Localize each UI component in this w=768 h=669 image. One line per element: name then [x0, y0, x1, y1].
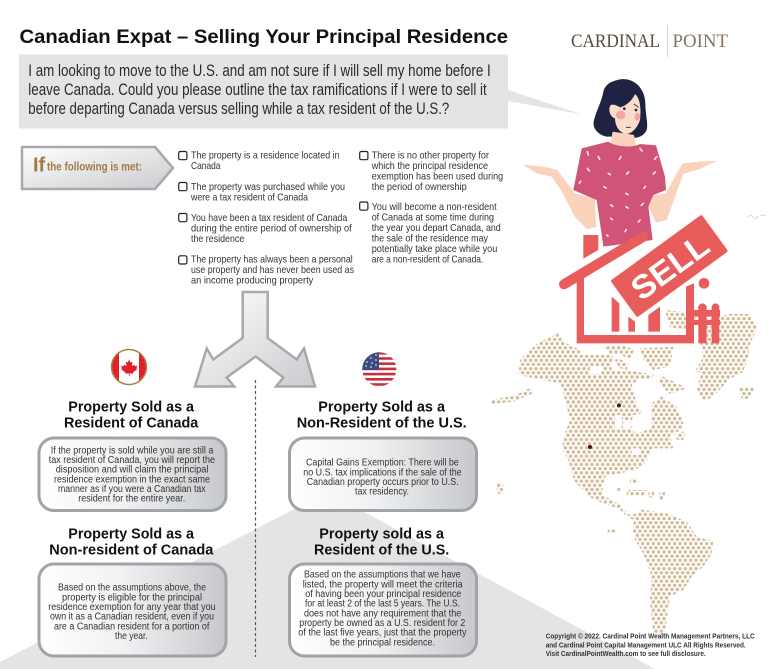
text box: If the property is sold while you are still a — [51, 445, 214, 456]
text box — [290, 564, 476, 656]
checklist column 2: which the principal residence — [371, 161, 488, 172]
icon: us flag — [362, 352, 397, 387]
text box: of the last five years, just that the property — [298, 628, 467, 639]
checklist column 2: exemption has been used during — [372, 171, 503, 182]
speech bubble question — [19, 54, 582, 128]
checklist column 2 — [360, 150, 503, 266]
text box: the year. — [115, 631, 148, 642]
text box: Based on the assumptions above, the — [58, 583, 206, 594]
heading: Property sold as a — [319, 526, 445, 542]
woman shrugging — [523, 79, 717, 247]
checklist column 2: There is no other property for — [372, 150, 489, 161]
heading: Property Sold as a — [68, 526, 195, 542]
text box: residence exemption for any year that you — [48, 602, 216, 613]
house with sell sign — [564, 212, 731, 343]
checklist column 1: an income producing property — [191, 276, 314, 287]
text box: be the principal residence. — [330, 637, 435, 648]
roof bar — [564, 237, 643, 284]
dotted map of the Americas — [492, 310, 757, 634]
text box: no U.S. tax implications if the sale of the — [303, 467, 462, 478]
panel: sold as a resident of canada — [39, 400, 226, 510]
heading — [314, 526, 449, 558]
heading: Resident of Canada — [64, 416, 199, 432]
text box: property be owned as a U.S. resident for 2 — [299, 618, 466, 629]
checklist column 2: are a non-resident of Canada. — [372, 254, 483, 266]
copyright: and Cardinal Point Capital Management ULC All Rights Reserved. — [546, 640, 746, 649]
speech bubble question: leave Canada. Could you please outline the tax ramifications if I were to sell it — [28, 81, 487, 99]
background triangle — [0, 492, 655, 669]
copyright — [546, 632, 755, 658]
heading: Resident of the U.S. — [314, 542, 449, 558]
title: Canadian Expat – Selling Your Principal Residence — [20, 26, 508, 48]
sell sign — [608, 212, 731, 320]
if the following is met tag — [22, 147, 173, 189]
checklist column 1: Canada — [191, 161, 221, 172]
panel: sold as a non-resident of the us — [290, 400, 476, 510]
fence — [693, 303, 720, 343]
heading: Property Sold as a — [318, 400, 446, 416]
split arrow — [195, 292, 315, 386]
checklist column 1: were a tax resident of Canada — [190, 192, 308, 204]
text box: resident for the entire year. — [78, 494, 185, 505]
text box — [39, 564, 226, 656]
logo: POINT — [672, 32, 728, 52]
checkboxes — [360, 152, 368, 210]
icon: canada flag — [110, 349, 148, 385]
text box: listed, the property will meet the criteria — [303, 579, 463, 590]
text box: for at least 2 of the last 5 years. The U.S. — [305, 599, 460, 610]
text box: are a Canadian resident for a portion of — [54, 621, 209, 632]
speech bubble question: I am looking to move to the U.S. and am not sure if I will sell my home before I — [28, 62, 491, 80]
text box: Canadian property occurs prior to U.S. — [307, 477, 459, 488]
stray marks — [748, 215, 766, 218]
heading: Property Sold as a — [68, 400, 195, 416]
checklist column 2: You will become a non-resident — [372, 202, 497, 213]
checklist column 1: use property and has never been used as — [191, 265, 354, 276]
text box: disposition and will claim the principal — [56, 465, 208, 476]
map markers — [588, 403, 621, 449]
panel: sold as a non-resident of canada — [39, 526, 226, 656]
panel: sold as a resident of the us — [290, 526, 476, 656]
checklist column 1: during the entire period of ownership of — [191, 224, 352, 234]
text box: Based on the assumptions that we have — [304, 570, 461, 581]
speech bubble question: before departing Canada versus selling while a tax resident of the U.S.? — [28, 100, 449, 118]
checklist column 1: the residence — [191, 234, 245, 245]
text box: residence exemption in the exact same — [54, 474, 210, 485]
checklist column 1: The property was purchased while you — [191, 182, 345, 193]
heading — [64, 400, 199, 432]
text box: property is eligible for the principal — [62, 592, 202, 603]
text box: does not have any requirement that the — [304, 608, 462, 619]
checklist column 1: The property is a residence located in — [191, 150, 340, 161]
text box: Capital Gains Exemption: There will be — [306, 458, 459, 469]
text box — [39, 438, 226, 510]
if the following is met tag: If — [33, 154, 46, 176]
checklist column 1: The property has always been a personal — [191, 255, 353, 266]
text box: tax residency. — [355, 487, 409, 498]
heading — [49, 526, 214, 558]
checklist column 2: the year you depart Canada, and — [372, 223, 501, 234]
dashed divider — [254, 380, 256, 657]
sell sign: SELL — [624, 226, 716, 307]
checklist column 1: You have been a tax resident of Canada — [191, 213, 348, 224]
copyright: Visit CardinalPointWealth.com to see full disclosure. — [546, 649, 706, 658]
logo: CARDINAL — [571, 32, 660, 52]
text box: of having been your principal residence — [305, 589, 462, 600]
heading: Non-Resident of the U.S. — [297, 416, 467, 432]
logo — [571, 25, 728, 57]
heading — [297, 400, 467, 432]
checklist column 2: potentially take place while you — [372, 244, 498, 255]
text box: manner as if you were a Canadian tax — [58, 484, 206, 495]
heading: Non-resident of Canada — [49, 542, 214, 558]
house walls and chimney — [577, 235, 694, 343]
checkboxes — [179, 152, 187, 264]
if the following is met tag: the following is met: — [47, 162, 142, 174]
checklist column 2: the sale of the residence may — [372, 234, 489, 244]
text box — [290, 438, 476, 510]
text box: tax resident of Canada, you will report the — [49, 455, 215, 466]
checklist column 1 — [179, 150, 354, 287]
checklist column 2: of Canada at some time during — [372, 212, 494, 224]
checklist column 2: the period of ownership — [372, 182, 467, 193]
door — [612, 297, 660, 332]
text box: own it as a Canadian resident, even if you — [50, 612, 214, 623]
